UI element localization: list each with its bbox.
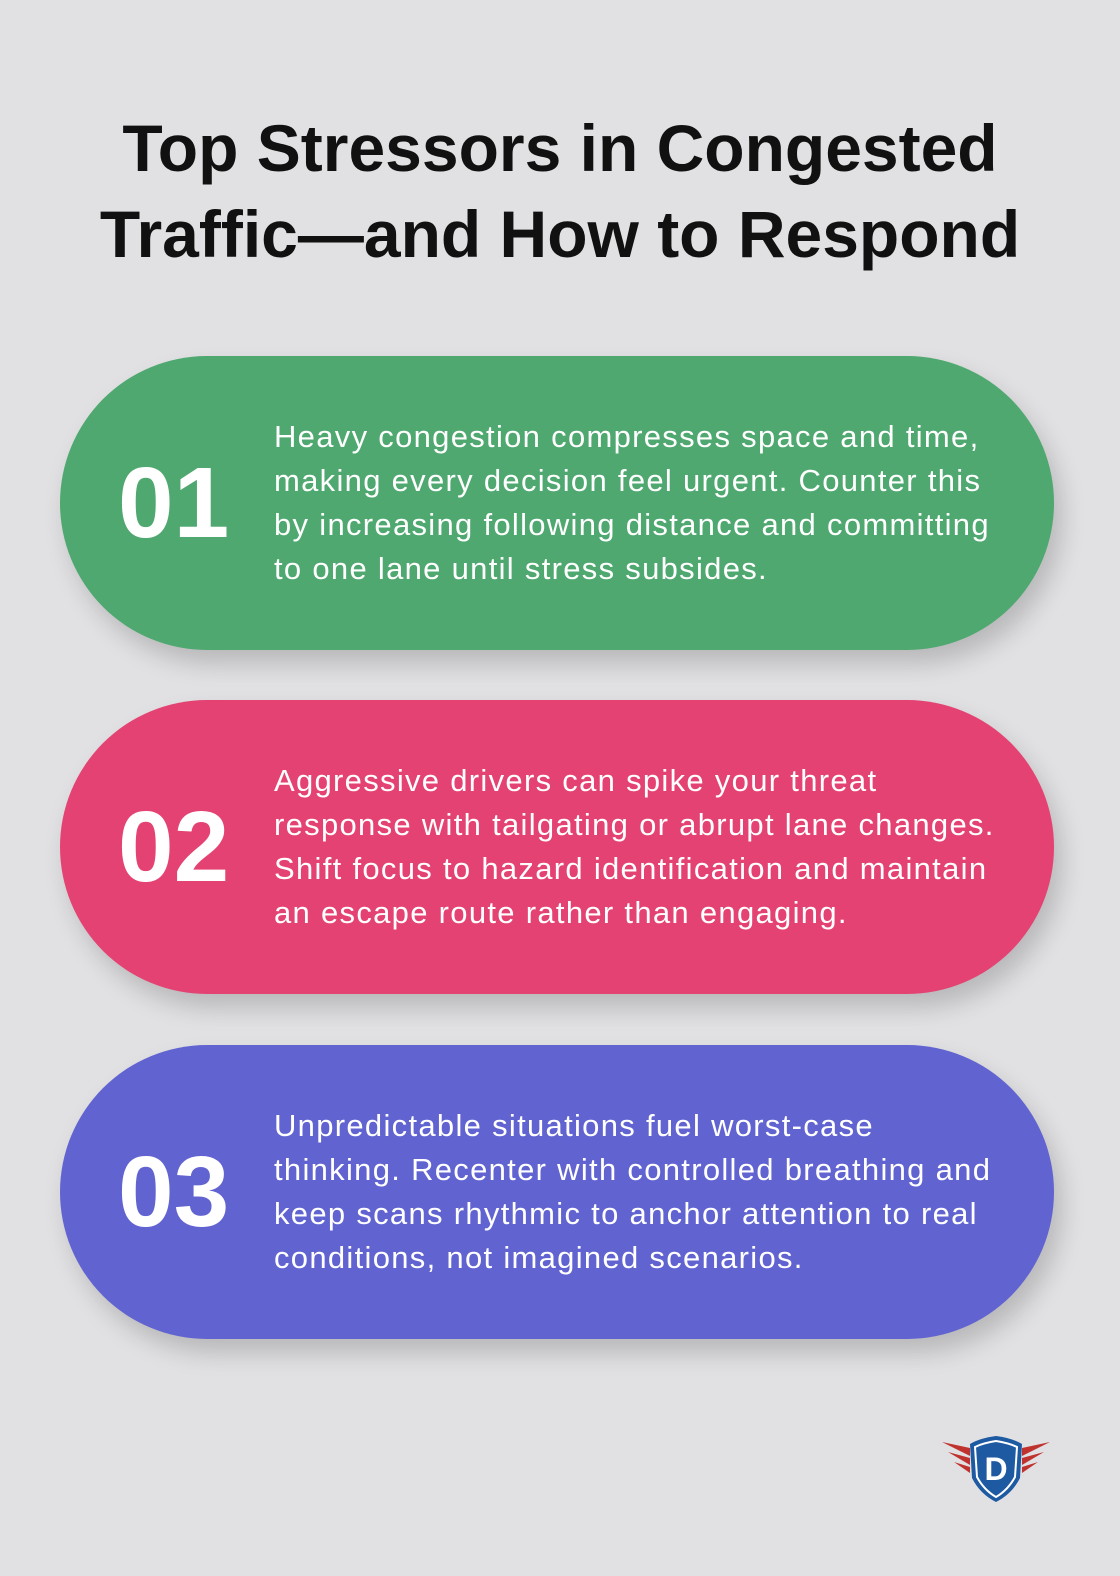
- text 02: [274, 763, 995, 930]
- text 02: Aggressive drivers can spike your threat: [274, 763, 877, 798]
- panel: 02: [60, 700, 1054, 994]
- text 03: Unpredictable situations fuel worst-case: [274, 1108, 874, 1143]
- text 01: Heavy congestion compresses space and time,: [274, 419, 980, 454]
- text 02: an escape route rather than engaging.: [274, 895, 848, 930]
- text 02: Shift focus to hazard identification and maintain: [274, 851, 987, 886]
- text 01: by increasing following distance and committing: [274, 507, 990, 542]
- text 03: thinking. Recenter with controlled breathing and: [274, 1152, 991, 1187]
- title: Top Stressors in Congested: [122, 111, 998, 185]
- text 01: to one lane until stress subsides.: [274, 551, 768, 586]
- title: Traffic—and How to Respond: [100, 197, 1020, 271]
- text 03: conditions, not imagined scenarios.: [274, 1240, 804, 1275]
- text 01: [274, 419, 990, 586]
- panel: 03: [60, 1045, 1054, 1339]
- number 03: 03: [118, 1136, 229, 1248]
- text 03: keep scans rhythmic to anchor attention to real: [274, 1196, 978, 1231]
- text 01: making every decision feel urgent. Counter this: [274, 463, 981, 498]
- panel: 01: [60, 356, 1054, 650]
- number 01: 01: [118, 447, 229, 559]
- text 02: response with tailgating or abrupt lane changes.: [274, 807, 995, 842]
- title: [100, 111, 1020, 271]
- number 02: 02: [118, 791, 229, 903]
- icon: logo shield: [942, 1436, 1050, 1502]
- icon: logo shield: D: [984, 1451, 1008, 1487]
- text 03: [274, 1108, 991, 1275]
